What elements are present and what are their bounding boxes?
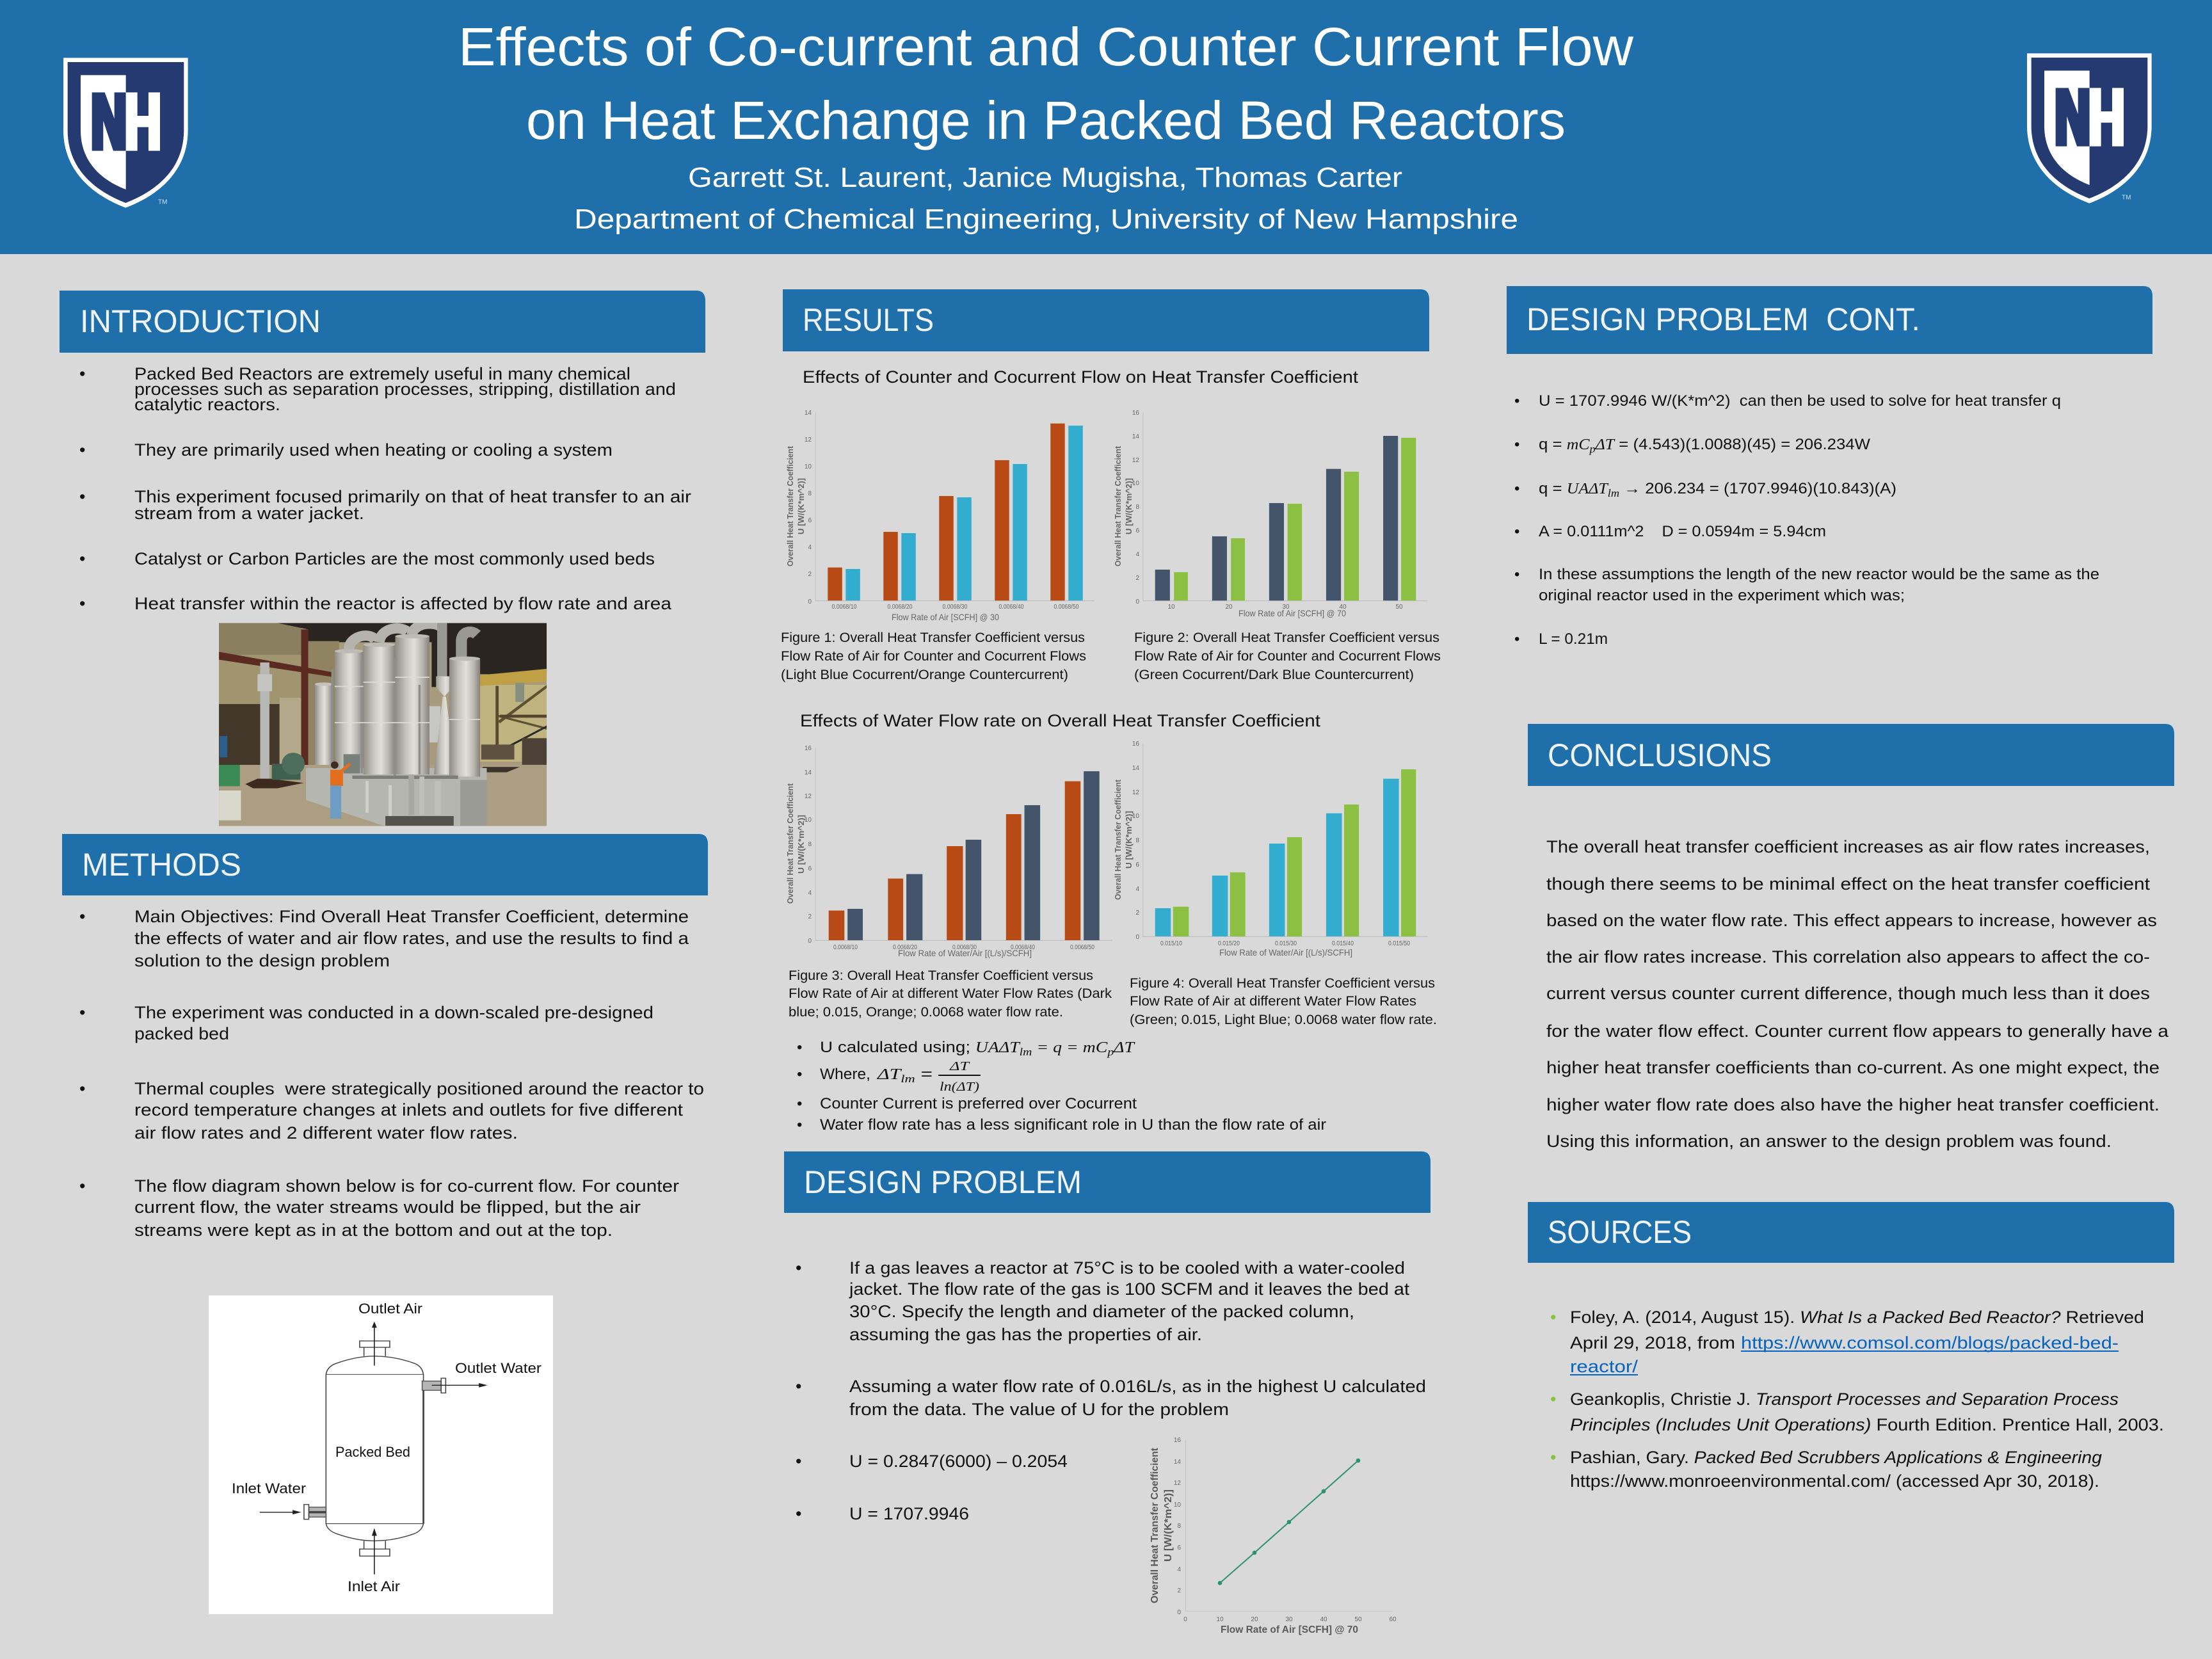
authors: Garrett St. Laurent, Janice Mugisha, Thomas Carter [688, 162, 1402, 193]
bar chart: figure 4: 0 [1135, 934, 1139, 941]
heading: methods [62, 834, 708, 895]
bar chart: figure 4: 12 [1132, 789, 1139, 796]
panel: sources [1528, 1202, 2174, 1491]
bar chart: figure 2: 10 [1132, 480, 1139, 487]
heading: results [783, 289, 1429, 351]
bar chart: figure 3: 0.0068/10 [833, 944, 858, 951]
title [458, 17, 1633, 150]
bar chart: figure 3: 10 [805, 817, 812, 824]
text block: introduction bullets: stream from a water jacket. [134, 504, 364, 523]
icon: left UNH shield logo: TM [158, 199, 167, 206]
text block: references: https://www.monroeenvironmental.com/ (accessed Apr 30, 2018). [1570, 1471, 2099, 1491]
bar chart: figure 4: 16 [1132, 741, 1139, 748]
bar chart: figure 1: 4 [808, 544, 812, 551]
line chart: U versus flow rate of air: 8 [1177, 1523, 1181, 1530]
bar chart: figure 4: Flow Rate of Water/Air [(L/s)/SCFH] [1219, 947, 1352, 958]
subheading: counter vs cocurrent: Effects of Counter and Cocurrent Flow on Heat Transfer Coefficient [803, 367, 1359, 387]
line chart: U versus flow rate of air: 6 [1177, 1544, 1181, 1551]
text block: conclusions paragraph: higher heat transfer coefficients than co-current. As one might expect, the [1546, 1058, 2160, 1077]
label: inlet air: Inlet Air [348, 1578, 400, 1594]
line chart: U versus flow rate of air: U [W/(K*m^2)] [1163, 1489, 1174, 1562]
text block: design calculations: = (4.543)(1.0088)(45) = 206.234W [1619, 436, 1852, 453]
text block: introduction bullets: This experiment focused primarily on that of heat transfer to an air [134, 487, 691, 506]
caption: figure 1: Flow Rate of Air for Counter and Cocurrent Flows [781, 649, 1086, 664]
bar chart: figure 3: 0.0068/40 [1011, 944, 1035, 951]
bar chart: figure 4: 0.015/50 [1388, 940, 1410, 947]
line chart: U versus flow rate of air: 10 [1174, 1502, 1181, 1509]
text block: design calculations: ΔT [1595, 437, 1615, 453]
text block: introduction bullets: Catalyst or Carbon Particles are the most commonly used beds [134, 549, 655, 568]
text block: references: • [1550, 1308, 1556, 1327]
label: outlet water: Outlet Water [455, 1360, 541, 1376]
text block: design calculations: A = 0.0111m^2 D = 0.0594m = 5.94cm [1539, 523, 1826, 540]
bar chart: figure 3: Overall Heat Transfer Coefficient [785, 783, 795, 904]
bar chart: figure 1: 0 [808, 598, 812, 605]
text block: results bullets with equations: ΔT [949, 1059, 970, 1073]
text block: design calculations: original reactor used in the experiment which was; [1539, 587, 1905, 604]
text block: results bullets with equations: Water flow rate has a less significant role in U than the flow rate of air [820, 1116, 1326, 1134]
bar chart: figure 3: 0.0068/30 [952, 944, 977, 951]
bar chart: figure 1: 2 [808, 571, 812, 578]
bar chart: figure 2: 40 [1339, 604, 1347, 611]
line chart: U versus flow rate of air: 0 [1177, 1609, 1181, 1616]
heading: sources [1528, 1202, 2174, 1263]
text block: conclusions paragraph [1546, 837, 2169, 1151]
text block: conclusions paragraph: the air flow rates increase. This correlation also appears to affect the co- [1546, 947, 2150, 966]
text block: references: Pashian, Gary. Packed Bed Scrubbers Applications & Engineering [1570, 1448, 2102, 1467]
bar chart: figure 1: 6 [808, 517, 812, 524]
text block: design calculations: U = 1707.9946 W/(K*m^2) can then be used to solve for heat transfer q [1539, 392, 2061, 410]
text block: references [1550, 1308, 2164, 1491]
text block: conclusions paragraph: Using this information, an answer to the design problem was found. [1546, 1132, 2112, 1151]
bar chart: figure 4 [1113, 741, 1428, 958]
text block: design problem statement [796, 1258, 1426, 1523]
line chart: U versus flow rate of air: Flow Rate of Air [SCFH] @ 70 [1221, 1624, 1358, 1635]
heading: conclusions: CONCLUSIONS [1548, 737, 1772, 773]
caption: figure 3: blue; 0.015, Orange; 0.0068 water flow rate. [789, 1005, 1063, 1020]
panel: conclusions [1528, 724, 2174, 1151]
text block: methods bullets: • [79, 907, 85, 926]
text block: results bullets with equations: • [797, 1116, 802, 1134]
heading: methods: METHODS [82, 847, 241, 883]
text block: results bullets with equations: • [797, 1095, 802, 1112]
icon: right UNH shield logo [2027, 53, 2152, 204]
text block: introduction bullets: Packed Bed Reactors are extremely useful in many chemical [134, 364, 630, 383]
text block: results bullets with equations: • [797, 1039, 802, 1056]
text block: design calculations: • [1514, 480, 1519, 497]
text block: methods bullets: • [79, 1176, 85, 1196]
bar chart: figure 2: 50 [1395, 604, 1403, 611]
bar chart: figure 1: 0.0068/40 [998, 604, 1024, 611]
text block: design problem statement: • [796, 1504, 801, 1523]
caption: figure 2: (Green Cocurrent/Dark Blue Countercurrent) [1134, 668, 1414, 682]
text block: references: • [1550, 1448, 1556, 1467]
bar chart: figure 4: U [W/(K*m^2)] [1124, 811, 1134, 869]
text block: results bullets with equations: Where, [820, 1066, 870, 1083]
bar chart: figure 1: Flow Rate of Air [SCFH] @ 30 [892, 612, 999, 622]
bar chart: figure 2: 6 [1135, 527, 1139, 534]
text block: results bullets with equations: lm [1020, 1046, 1032, 1058]
text block: results bullets with equations: ln(ΔT) [940, 1080, 979, 1094]
caption: figure 3: Figure 3: Overall Heat Transfer Coefficient versus [789, 968, 1093, 983]
caption: figure 1 [781, 630, 1086, 682]
panel: design problem continued [1507, 286, 2152, 648]
text block: design problem statement: jacket. The flow rate of the gas is 100 SCFM and it leaves the bed at [849, 1279, 1410, 1299]
bar chart: figure 1: U [W/(K*m^2)] [796, 478, 806, 534]
text block: design calculations: L = 0.21m [1539, 630, 1608, 648]
text block: design problem statement: • [796, 1452, 801, 1471]
text block: references: • [1550, 1390, 1556, 1409]
bar chart: figure 2: 20 [1225, 604, 1233, 611]
icon: left UNH shield logo [63, 58, 188, 208]
header banner [0, 0, 2212, 254]
text block: design calculations: q = mC [1539, 436, 1588, 453]
text block: conclusions paragraph: for the water flow effect. Counter current flow appears to generally have a [1546, 1022, 2169, 1041]
text block: design problem statement: If a gas leaves a reactor at 75°C is to be cooled with a water-cooled [849, 1258, 1405, 1278]
text block: introduction bullets: • [79, 549, 85, 568]
text block: conclusions paragraph: higher water flow rate does also have the higher heat transfer coefficient. [1546, 1095, 2160, 1114]
bar chart: figure 4: 0.015/10 [1160, 940, 1182, 947]
text block: design calculations: → 206.234 = (1707.9946)(10.843)(A) [1619, 480, 1896, 497]
caption: figure 1: (Light Blue Cocurrent/Orange Countercurrent) [781, 668, 1068, 682]
bar chart: figure 2: 16 [1132, 410, 1139, 417]
line chart: U versus flow rate of air: 50 [1354, 1616, 1362, 1623]
bar chart: figure 3: Flow Rate of Water/Air [(L/s)/SCFH] [898, 948, 1032, 958]
text block: introduction bullets: • [79, 594, 85, 613]
bar chart: figure 4: 0.015/20 [1218, 940, 1240, 947]
text block: design problem statement: • [796, 1258, 801, 1278]
line chart: U versus flow rate of air [1150, 1437, 1397, 1635]
text block: methods bullets: • [79, 1079, 85, 1098]
bar chart: figure 4: 14 [1132, 765, 1139, 772]
line chart: U versus flow rate of air: 10 [1216, 1616, 1224, 1623]
text block: methods bullets: air flow rates and 2 different water flow rates. [134, 1123, 518, 1142]
bar chart: figure 1: 14 [805, 410, 812, 417]
bar chart: figure 3: 4 [808, 890, 812, 897]
text block: methods bullets: The experiment was conducted in a down-scaled pre-designed [134, 1003, 653, 1022]
icon: right UNH shield logo: TM [2122, 195, 2131, 202]
label: packed bed: Packed Bed [335, 1444, 410, 1460]
heading: results: RESULTS [803, 302, 934, 338]
line chart: U versus flow rate of air: 30 [1285, 1616, 1293, 1623]
bar chart: figure 4: 6 [1135, 862, 1139, 869]
bar chart: figure 2: U [W/(K*m^2)] [1124, 478, 1134, 534]
bar chart: figure 1: 0.0068/30 [942, 604, 968, 611]
text block: methods bullets: current flow, the water streams would be flipped, but the air [134, 1198, 641, 1217]
heading: design problem cont.: DESIGN PROBLEM CONT. [1527, 301, 1920, 337]
caption: figure 4 [1130, 976, 1437, 1027]
text block: references: Geankoplis, Christie J. Transport Processes and Separation Process [1570, 1390, 2119, 1409]
text block: introduction bullets: catalytic reactors. [134, 395, 280, 414]
flow diagram: packed bed reactor [209, 1295, 553, 1614]
text block: design calculations: p [1589, 443, 1596, 455]
bar chart: figure 4: 4 [1135, 886, 1139, 893]
bar chart: figure 3: 16 [805, 745, 812, 752]
heading: introduction [60, 291, 705, 353]
text block: methods bullets: streams were kept as in at the bottom and out at the top. [134, 1221, 613, 1240]
caption: figure 2: Figure 2: Overall Heat Transfer Coefficient versus [1134, 630, 1439, 645]
heading: design problem: DESIGN PROBLEM [804, 1164, 1082, 1200]
bar chart: figure 2: 30 [1282, 604, 1290, 611]
text block: results bullets with equations: • [797, 1066, 802, 1083]
text block: design calculations: In these assumptions the length of the new reactor would be the same as the [1539, 566, 2099, 583]
text block: methods bullets: The flow diagram shown below is for co-current flow. For counter [134, 1176, 679, 1196]
text block: conclusions paragraph: though there seems to be minimal effect on the heat transfer coefficient [1546, 874, 2151, 894]
line chart: U versus flow rate of air: 2 [1177, 1587, 1181, 1594]
bar chart: figure 3: 8 [808, 841, 812, 848]
title: on Heat Exchange in Packed Bed Reactors [526, 90, 1566, 150]
text block: design problem statement: assuming the gas has the properties of air. [849, 1325, 1202, 1344]
photo: packed bed reactor columns in a workshop [219, 623, 547, 826]
bar chart: figure 4: 0.015/40 [1332, 940, 1354, 947]
bar chart: figure 3: 6 [808, 865, 812, 872]
text block: conclusions paragraph: based on the water flow rate. This effect appears to increase, however as [1546, 911, 2157, 930]
panel: results [781, 289, 1441, 1134]
text block: design calculations: lm [1608, 487, 1619, 499]
bar chart: figure 1: 10 [805, 463, 812, 470]
bar chart: figure 4: 0.015/30 [1275, 940, 1297, 947]
bar chart: figure 4: Overall Heat Transfer Coefficient [1113, 779, 1123, 900]
text block: results bullets with equations: = q = mC [1032, 1039, 1108, 1056]
bar chart: figure 1: 12 [805, 437, 812, 444]
panel: introduction [60, 291, 705, 826]
text block: references: reactor/ [1570, 1357, 1639, 1376]
bar chart: figure 2: 12 [1132, 457, 1139, 464]
line chart: U versus flow rate of air: 12 [1174, 1480, 1181, 1487]
text block: methods bullets: the effects of water and air flow rates, and use the results to find a [134, 929, 689, 948]
text block: design problem statement: 30°C. Specify the length and diameter of the packed column, [849, 1302, 1354, 1321]
text block: results bullets with equations: Counter Current is preferred over Cocurrent [820, 1095, 1137, 1112]
text block: references: https://www.comsol.com/blogs/packed-bed- [1741, 1333, 2119, 1352]
caption: figure 1: Figure 1: Overall Heat Transfer Coefficient versus [781, 630, 1085, 645]
caption: figure 3: Flow Rate of Air at different Water Flow Rates (Dark [789, 986, 1112, 1001]
text block: methods bullets [79, 907, 704, 1240]
bar chart: figure 2 [1113, 410, 1428, 618]
panel: methods [62, 834, 708, 1614]
text block: design problem statement: U = 0.2847(6000) – 0.2054 [849, 1452, 1068, 1471]
caption: figure 4: Figure 4: Overall Heat Transfer Coefficient versus [1130, 976, 1435, 991]
text block: methods bullets: • [79, 1003, 85, 1022]
caption: figure 4: (Green; 0.015, Light Blue; 0.0068 water flow rate. [1130, 1013, 1437, 1027]
heading: introduction: INTRODUCTION [80, 303, 321, 339]
panel: design problem [784, 1151, 1431, 1635]
bar chart: figure 2: Overall Heat Transfer Coefficient [1113, 445, 1123, 566]
text block: introduction bullets: • [79, 364, 85, 383]
text block: design calculations: • [1514, 392, 1519, 410]
line chart: U versus flow rate of air: 4 [1177, 1566, 1181, 1573]
heading: design problem [784, 1151, 1431, 1213]
text block: references: Principles (Includes Unit Operations) Fourth Edition. Prentice Hall, 2003. [1570, 1415, 2164, 1434]
text block: methods bullets: Thermal couples were strategically positioned around the reactor to [134, 1079, 704, 1098]
bar chart: figure 2: 0 [1135, 598, 1139, 605]
label: inlet water: Inlet Water [232, 1480, 306, 1496]
line chart: U versus flow rate of air: 16 [1174, 1437, 1181, 1444]
text block: references: April 29, 2018, from [1570, 1333, 1735, 1352]
caption: figure 2 [1134, 630, 1441, 682]
text block: results bullets with equations: ΔT [1113, 1039, 1135, 1056]
bar chart: figure 3: 0.0068/50 [1070, 944, 1094, 951]
text block: design calculations: • [1514, 523, 1519, 540]
title: Effects of Co-current and Counter Current Flow [458, 17, 1633, 77]
line chart: U versus flow rate of air: Overall Heat Transfer Coefficient [1150, 1447, 1160, 1603]
text block: introduction bullets: Heat transfer within the reactor is affected by flow rate and area [134, 594, 672, 613]
text block: results bullets with equations: ΔT [877, 1066, 902, 1083]
caption: figure 3 [789, 968, 1112, 1020]
text block: results bullets with equations [797, 1039, 1326, 1134]
text block: results bullets with equations: lm [901, 1073, 915, 1085]
label: outlet air: Outlet Air [358, 1301, 422, 1317]
text block: design calculations: q = UAΔT [1539, 480, 1605, 497]
department: Department of Chemical Engineering, University of New Hampshire [574, 204, 1518, 235]
bar chart: figure 3: U [W/(K*m^2)] [796, 815, 806, 874]
text block: introduction bullets: • [79, 487, 85, 506]
bar chart: figure 4: 8 [1135, 837, 1139, 844]
text block: design problem statement: Assuming a water flow rate of 0.016L/s, as in the highest U calculated [849, 1377, 1426, 1396]
bar chart: figure 2: 14 [1132, 433, 1139, 440]
bar chart: figure 2: 10 [1167, 604, 1175, 611]
bar chart: figure 4: 10 [1132, 813, 1139, 820]
text block: methods bullets: Main Objectives: Find Overall Heat Transfer Coefficient, determine [134, 907, 689, 926]
text block: design problem statement: U = 1707.9946 [849, 1504, 969, 1523]
bar chart: figure 1 [785, 410, 1094, 622]
heading: conclusions [1528, 724, 2174, 786]
text block: design problem statement: • [796, 1377, 801, 1396]
text block: methods bullets: packed bed [134, 1024, 229, 1043]
text block: methods bullets: record temperature changes at inlets and outlets for five different [134, 1100, 684, 1119]
line chart: U versus flow rate of air: 40 [1320, 1616, 1327, 1623]
heading: sources: SOURCES [1548, 1214, 1692, 1250]
text block: introduction bullets: They are primarily used when heating or cooling a system [134, 440, 613, 460]
bar chart: figure 3: 0 [808, 938, 812, 945]
bar chart: figure 2: 4 [1135, 551, 1139, 558]
text block: conclusions paragraph: The overall heat transfer coefficient increases as air flow rates increases, [1546, 837, 2150, 856]
text block: results bullets with equations: = [915, 1066, 933, 1083]
bar chart: figure 3: 12 [805, 793, 812, 800]
bar chart: figure 1: 0.0068/20 [887, 604, 913, 611]
text block: introduction bullets [79, 364, 691, 613]
bar chart: figure 2: 2 [1135, 575, 1139, 582]
text block: results bullets with equations: p [1107, 1046, 1114, 1058]
caption: figure 2: Flow Rate of Air for Counter and Cocurrent Flows [1134, 649, 1441, 664]
bar chart: figure 3: 2 [808, 913, 812, 920]
bar chart: figure 1: 0.0068/50 [1054, 604, 1079, 611]
bar chart: figure 2: Flow Rate of Air [SCFH] @ 70 [1238, 608, 1346, 618]
text block: methods bullets: solution to the design problem [134, 951, 390, 970]
bar chart: figure 1: Overall Heat Transfer Coefficient [785, 445, 795, 566]
text block: design problem statement: from the data. The value of U for the problem [849, 1400, 1229, 1419]
line chart: U versus flow rate of air: 0 [1183, 1616, 1187, 1623]
text block: results bullets with equations: U calculated using; UAΔT [820, 1039, 1013, 1056]
text block: design calculations [1514, 392, 2099, 648]
bar chart: figure 4: 2 [1135, 910, 1139, 917]
bar chart: figure 3 [785, 745, 1112, 958]
bar chart: figure 1: 8 [808, 490, 812, 497]
bar chart: figure 2: 8 [1135, 504, 1139, 511]
text block: design calculations: • [1514, 436, 1519, 453]
line chart: U versus flow rate of air: 14 [1174, 1459, 1181, 1466]
text block: conclusions paragraph: current versus counter current difference, though much less than it does [1546, 984, 2150, 1003]
text block: design calculations: • [1514, 566, 1519, 583]
text block: design calculations: • [1514, 630, 1519, 648]
text block: introduction bullets: • [79, 440, 85, 460]
caption: figure 4: Flow Rate of Air at different Water Flow Rates [1130, 994, 1416, 1009]
bar chart: figure 1: 0.0068/10 [832, 604, 857, 611]
line chart: U versus flow rate of air: 60 [1389, 1616, 1397, 1623]
text block: introduction bullets: processes such as separation processes, stripping, distillation and [134, 380, 676, 399]
line chart: U versus flow rate of air: 20 [1251, 1616, 1258, 1623]
bar chart: figure 3: 0.0068/20 [893, 944, 917, 951]
text block: references: Foley, A. (2014, August 15). What Is a Packed Bed Reactor? Retrieved [1570, 1308, 2144, 1327]
heading: design problem cont. [1507, 286, 2152, 354]
subheading: water flow rate: Effects of Water Flow rate on Overall Heat Transfer Coefficient [800, 711, 1321, 730]
bar chart: figure 3: 14 [805, 769, 812, 776]
